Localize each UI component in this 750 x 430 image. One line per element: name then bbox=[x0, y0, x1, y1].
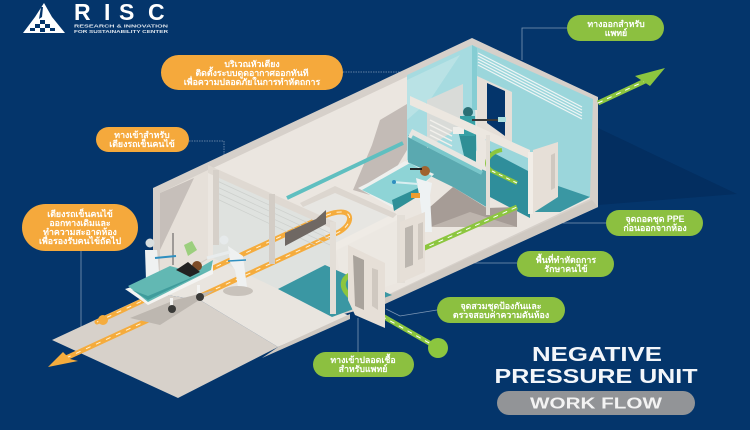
callout: doctor entrance: ทางเข้าปลอดเชื้อ bbox=[330, 353, 396, 365]
building shell and back wall bbox=[153, 38, 598, 317]
PPE cabin bbox=[427, 84, 463, 148]
callout: PPE removal: ก่อนออกจากห้อง bbox=[623, 223, 687, 233]
orange route bbox=[48, 212, 350, 367]
door: entrance bbox=[348, 245, 385, 328]
panel beam over room bbox=[410, 96, 530, 159]
callout: treatment area bbox=[517, 251, 614, 277]
callout: PPE donning: จุดสวมชุดป้องกันและ bbox=[461, 301, 542, 312]
door: middle bbox=[400, 212, 425, 283]
title: PRESSURE UNIT bbox=[494, 366, 698, 388]
callout: doctor exit: แพทย์ bbox=[605, 27, 627, 38]
ramp and entrance floor bbox=[52, 200, 598, 398]
patient head bbox=[420, 166, 430, 176]
patient room floor bbox=[430, 187, 517, 227]
callout: doctor entrance: สำหรับแพทย์ bbox=[339, 363, 387, 374]
title bbox=[494, 344, 698, 388]
callout: treatment area: พื้นที่ทำหัตถการ bbox=[536, 253, 596, 265]
callout: PPE removal: จุดถอดชุด PPE bbox=[626, 214, 685, 225]
IV pole bbox=[172, 233, 174, 265]
teal floor bbox=[535, 178, 590, 212]
preparation room frame bbox=[208, 165, 405, 314]
callout: stretcher exit and cleaning: ทำความสะอาดห้อง bbox=[43, 227, 117, 237]
shadow bbox=[130, 290, 215, 325]
callout: stretcher exit and cleaning bbox=[22, 204, 138, 251]
mattress bbox=[125, 262, 213, 305]
callout: bed-head exhaust bbox=[161, 55, 343, 90]
back door bbox=[477, 76, 512, 150]
callout: bed-head exhaust: บริเวณหัวเตียง bbox=[224, 59, 280, 69]
callout: stretcher exit and cleaning: เตียงรถเข็นคนไข้ bbox=[47, 207, 113, 219]
glass of preparation room bbox=[213, 172, 397, 317]
work flow pill bbox=[497, 391, 695, 415]
callout: stretcher exit and cleaning: เพื่อรองรับคนไข้ถัดไป bbox=[39, 234, 121, 246]
door: PPE bbox=[533, 142, 558, 213]
patient bed bbox=[358, 133, 482, 232]
logo: RISC: RESEARCH & INNOVATION bbox=[74, 24, 169, 30]
callout: bed-head exhaust: เพื่อความปลอดภัยในการทำหัตถการ bbox=[184, 75, 320, 87]
callout: treatment area: รักษาคนไข้ bbox=[544, 263, 588, 274]
teal floor bbox=[278, 265, 392, 317]
exit arrow: green bbox=[598, 68, 665, 103]
doctor bbox=[220, 236, 228, 244]
leader lines bbox=[81, 28, 606, 352]
doctor at exit bbox=[453, 107, 506, 165]
pillars bbox=[213, 170, 219, 245]
room: teal treatment room walls bbox=[407, 45, 593, 218]
logo: RISC: FOR SUSTAINABILITY CENTER bbox=[74, 29, 169, 35]
wall vents bbox=[478, 53, 582, 119]
work flow pill: WORK FLOW bbox=[530, 396, 662, 412]
callout: PPE removal bbox=[606, 210, 703, 236]
callout: stretcher entrance: เตียงรถเข็นคนไข้ bbox=[109, 137, 175, 149]
cabin vent lines bbox=[430, 120, 452, 146]
shadow of bed on wall bbox=[353, 104, 407, 195]
slats bbox=[215, 180, 330, 245]
gurney team bbox=[125, 233, 253, 325]
doors bbox=[348, 135, 558, 328]
callout: stretcher entrance: ทางเข้าสำหรับ bbox=[114, 130, 170, 140]
dark vent bbox=[285, 210, 326, 246]
callout: PPE donning bbox=[437, 297, 565, 323]
title: NEGATIVE bbox=[532, 344, 662, 366]
patient head bbox=[192, 261, 202, 271]
callout: doctor exit: ทางออกสำหรับ bbox=[587, 19, 645, 29]
callout: doctor entrance bbox=[313, 352, 414, 377]
bed legs bbox=[170, 298, 173, 310]
callout: stretcher exit and cleaning: ออกทางเดิมและ bbox=[49, 218, 111, 228]
building cast shadow bbox=[598, 128, 737, 205]
medical staff at bed bbox=[416, 178, 432, 232]
callout: stretcher entrance bbox=[96, 127, 189, 152]
green route bbox=[343, 150, 517, 358]
callout: bed-head exhaust: ติดตั้งระบบดูดอากาศออกทันที bbox=[195, 66, 309, 79]
callout: doctor exit bbox=[567, 15, 664, 41]
pillars bbox=[528, 152, 533, 214]
callout: PPE donning: ตรวจสอบค่าความดันห้อง bbox=[453, 310, 549, 320]
nurse bbox=[146, 238, 154, 248]
teal wall strip bbox=[287, 143, 403, 198]
logo: RISC bbox=[23, 0, 169, 35]
